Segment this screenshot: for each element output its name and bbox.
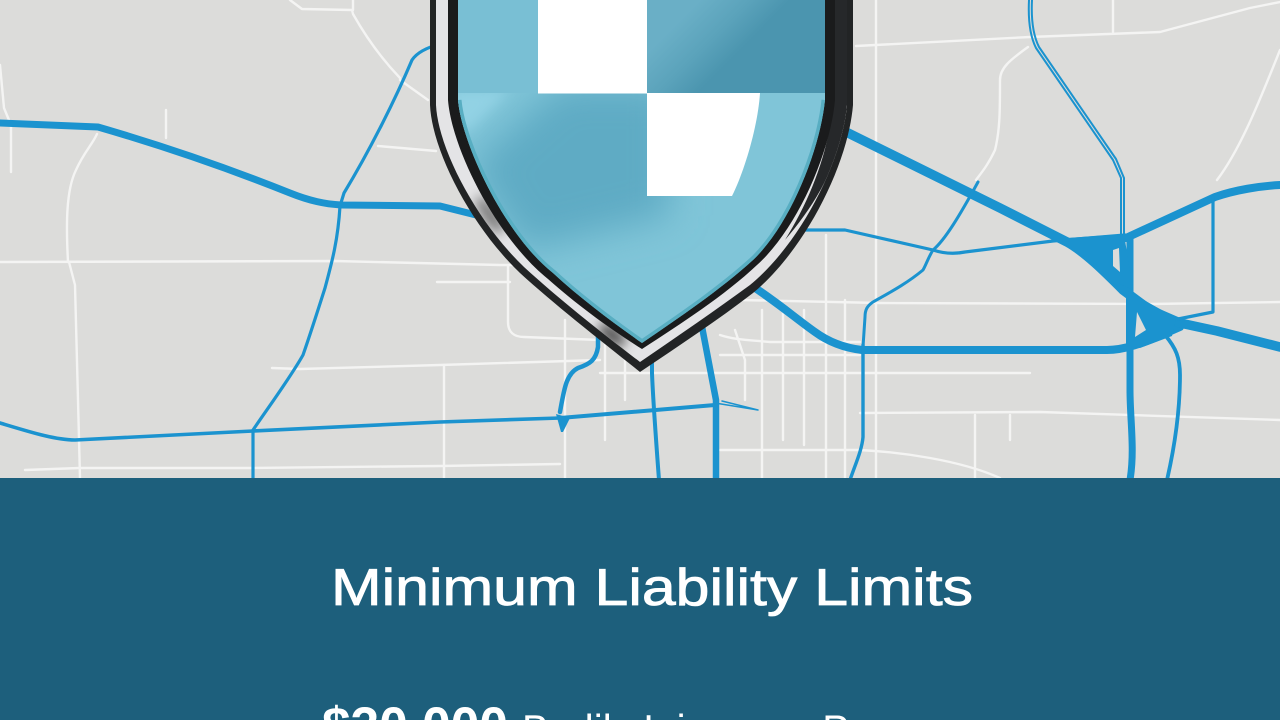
white upper block	[538, 0, 647, 94]
lower interchange	[1126, 298, 1174, 348]
shield	[430, 0, 853, 380]
highway network	[0, 0, 1280, 480]
shield blue face	[458, 0, 825, 343]
lower-left shading	[452, 85, 670, 250]
upper interchange	[1069, 235, 1126, 286]
map background	[0, 0, 1280, 480]
shield silver bevel	[436, 0, 847, 362]
footer panel	[0, 478, 1280, 720]
shield right dark band	[785, 0, 847, 240]
upper-left quadrant	[458, 0, 538, 93]
upper-right quadrant	[647, 0, 837, 93]
white lower block	[647, 93, 760, 196]
shield inner dark rim	[448, 0, 835, 349]
bevel shading	[471, 0, 847, 352]
heading: Minimum Liability Limits	[331, 559, 973, 617]
shield outer dark rim	[430, 0, 853, 372]
minor streets	[0, 0, 1280, 478]
face edge bevel	[458, 100, 825, 343]
